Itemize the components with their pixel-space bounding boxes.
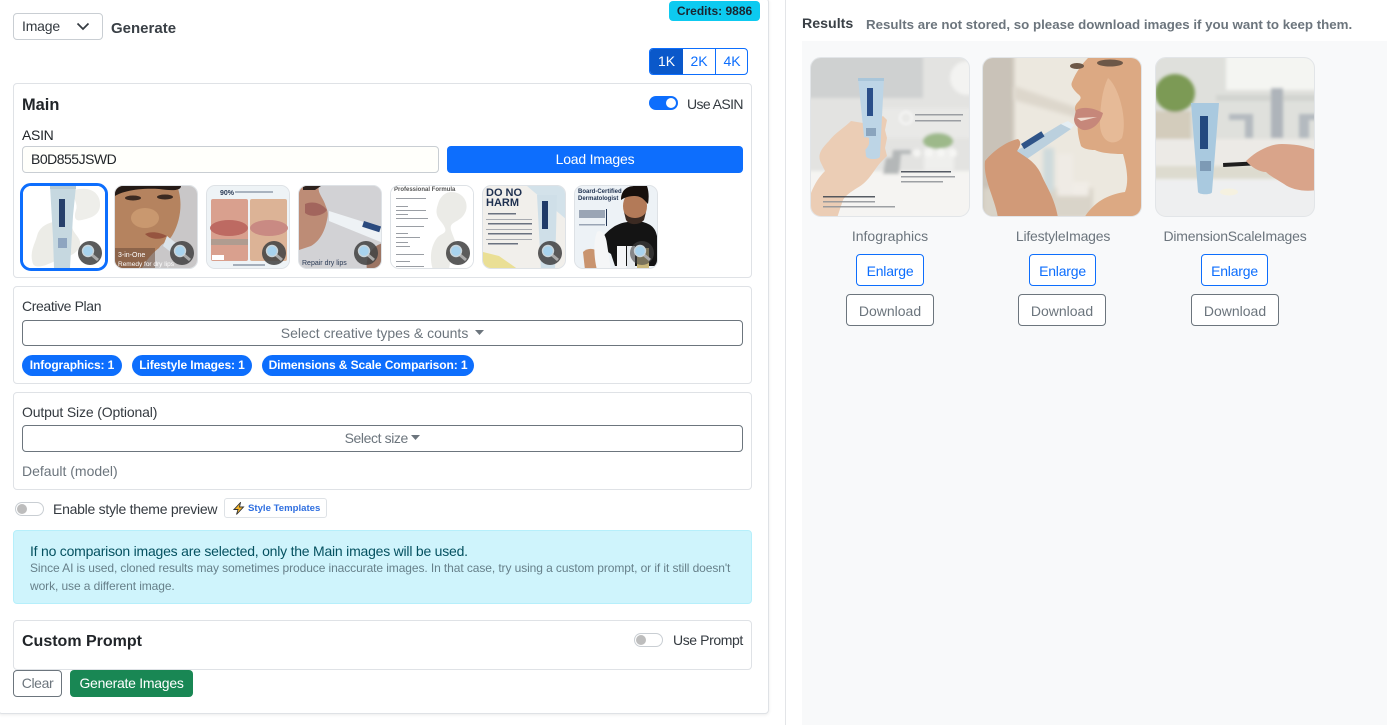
heading: results: Results bbox=[802, 16, 853, 32]
resolution button group bbox=[649, 48, 748, 75]
dropdown: creative types bbox=[22, 320, 743, 346]
dropdown: creative types: Select creative types & counts bbox=[281, 325, 468, 341]
panel: results area bbox=[802, 41, 1387, 725]
icon: magnifier bbox=[354, 241, 378, 265]
heading: custom prompt: Custom Prompt bbox=[22, 633, 142, 650]
button: download 1 bbox=[846, 294, 934, 326]
button: enlarge 3 bbox=[1201, 254, 1268, 286]
text: alert details: work, use a different image. bbox=[30, 579, 175, 593]
thumbnail 7: dermatologist: Dermatologist bbox=[578, 196, 618, 202]
tag: dimensions and scale: Dimensions & Scale Comparison: 1 bbox=[269, 358, 467, 372]
dropdown: select size: Select size bbox=[345, 430, 408, 446]
tag: infographics: Infographics: 1 bbox=[30, 358, 114, 372]
thumbnail 3: before and after lips bbox=[206, 185, 290, 269]
button: style templates bbox=[224, 498, 327, 518]
button: enlarge 2: Enlarge bbox=[1039, 263, 1086, 279]
thumbnail 2: face portrait: Remedy for dry lips bbox=[118, 261, 175, 268]
credits badge bbox=[669, 1, 760, 21]
button: download 3 bbox=[1191, 294, 1279, 326]
button: download 3: Download bbox=[1204, 303, 1266, 319]
panel: left form background bbox=[0, 0, 769, 714]
toggle: style theme preview: Enable style theme preview bbox=[53, 501, 217, 517]
heading: main: Main bbox=[22, 96, 59, 114]
thumbnail 6: do no harm bbox=[482, 185, 566, 269]
button: generate images: Generate Images bbox=[79, 675, 184, 691]
button: load images bbox=[447, 146, 743, 173]
divider line bbox=[785, 0, 786, 725]
caption: dimension scale images: DimensionScaleImages bbox=[1163, 228, 1307, 244]
thumbnail 4: tube at lips: Repair dry lips bbox=[302, 260, 347, 267]
thumbnail 2: face portrait: 3-in-One bbox=[118, 252, 145, 259]
icon: lightning bbox=[233, 502, 244, 515]
thumbnail 2: face portrait bbox=[114, 185, 198, 269]
icon: magnifier bbox=[78, 241, 102, 265]
credits badge: Credits: 9886 bbox=[677, 4, 752, 18]
text: alert details: Since AI is used, cloned results may sometimes produce inaccurate images. In that case, try using a custom prompt, or if it still doesn't bbox=[30, 561, 730, 575]
label: ASIN: ASIN bbox=[22, 127, 53, 143]
dropdown: image type: Image bbox=[22, 18, 60, 34]
tag: lifestyle images bbox=[132, 355, 252, 376]
button: enlarge 1 bbox=[856, 254, 924, 286]
button: style templates: Style Templates bbox=[248, 503, 320, 514]
button: enlarge 3: Enlarge bbox=[1211, 263, 1258, 279]
thumbnail 7: dermatologist bbox=[574, 185, 658, 269]
thumbnail 3: before and after lips: 90% bbox=[220, 190, 235, 197]
resolution button group: 1K bbox=[658, 53, 675, 69]
button: download 2 bbox=[1018, 294, 1106, 326]
toggle: use ASIN: Use ASIN bbox=[687, 96, 743, 112]
button: enlarge 1: Enlarge bbox=[867, 263, 913, 279]
thumbnail 6: do no harm: DO NO bbox=[486, 187, 522, 199]
dropdown: image type bbox=[13, 13, 103, 40]
thumbnail 5: professional formula bbox=[390, 185, 474, 269]
alert: info note bbox=[13, 530, 752, 604]
panel: custom prompt bbox=[13, 620, 752, 670]
tag: dimensions and scale bbox=[262, 355, 474, 376]
resolution button group: 2K bbox=[690, 53, 708, 69]
button: download 2: Download bbox=[1031, 303, 1093, 319]
button: enlarge 2 bbox=[1029, 254, 1096, 286]
thumbnail 4: tube at lips bbox=[298, 185, 382, 269]
icon: magnifier bbox=[446, 241, 470, 265]
label: output size: Output Size (Optional) bbox=[22, 404, 157, 420]
tag: lifestyle images: Lifestyle Images: 1 bbox=[139, 358, 245, 372]
result image: infographics bbox=[810, 57, 970, 217]
button: download 1: Download bbox=[859, 303, 921, 319]
icon: magnifier bbox=[170, 241, 194, 265]
thumbnail 1: selected tube bbox=[20, 183, 108, 271]
icon: magnifier bbox=[538, 241, 562, 265]
dropdown: select size bbox=[22, 425, 743, 452]
panel: creative plan bbox=[13, 286, 752, 384]
thumbnail 5: professional formula: Professional Formula bbox=[394, 187, 456, 193]
icon: magnifier bbox=[630, 241, 654, 265]
button: load images: Load Images bbox=[556, 151, 634, 167]
result image: dimension scale bbox=[1155, 57, 1315, 217]
thumbnail 6: do no harm: HARM bbox=[486, 197, 519, 209]
tag: infographics bbox=[22, 355, 122, 376]
text: results note: Results are not stored, so please download images if you want to keep them. bbox=[866, 17, 1352, 32]
label: creative plan: Creative Plan bbox=[22, 298, 101, 314]
button: clear bbox=[13, 670, 62, 697]
button: generate images bbox=[70, 670, 193, 697]
toggle: use prompt bbox=[634, 632, 744, 648]
text: alert heading: If no comparison images are selected, only the Main images will be used. bbox=[30, 543, 468, 559]
toggle: use ASIN bbox=[649, 96, 743, 112]
toggle: use prompt: Use Prompt bbox=[673, 632, 743, 648]
text: default model: Default (model) bbox=[22, 463, 118, 479]
caption: lifestyle images: LifestyleImages bbox=[1016, 228, 1110, 244]
thumbnail 7: dermatologist: Board-Certified bbox=[578, 189, 622, 195]
result image: lifestyle bbox=[982, 57, 1142, 217]
resolution button group: 4K bbox=[723, 53, 741, 69]
input: ASIN value: B0D855JSWD bbox=[31, 151, 116, 167]
input: ASIN value bbox=[22, 146, 439, 173]
icon: magnifier bbox=[262, 241, 286, 265]
heading: generate: Generate bbox=[111, 20, 176, 37]
caption: infographics: Infographics bbox=[852, 228, 928, 244]
panel: main bbox=[13, 83, 752, 278]
button: clear: Clear bbox=[22, 675, 53, 691]
text: alert details bbox=[30, 561, 730, 593]
panel: output size bbox=[13, 392, 752, 490]
